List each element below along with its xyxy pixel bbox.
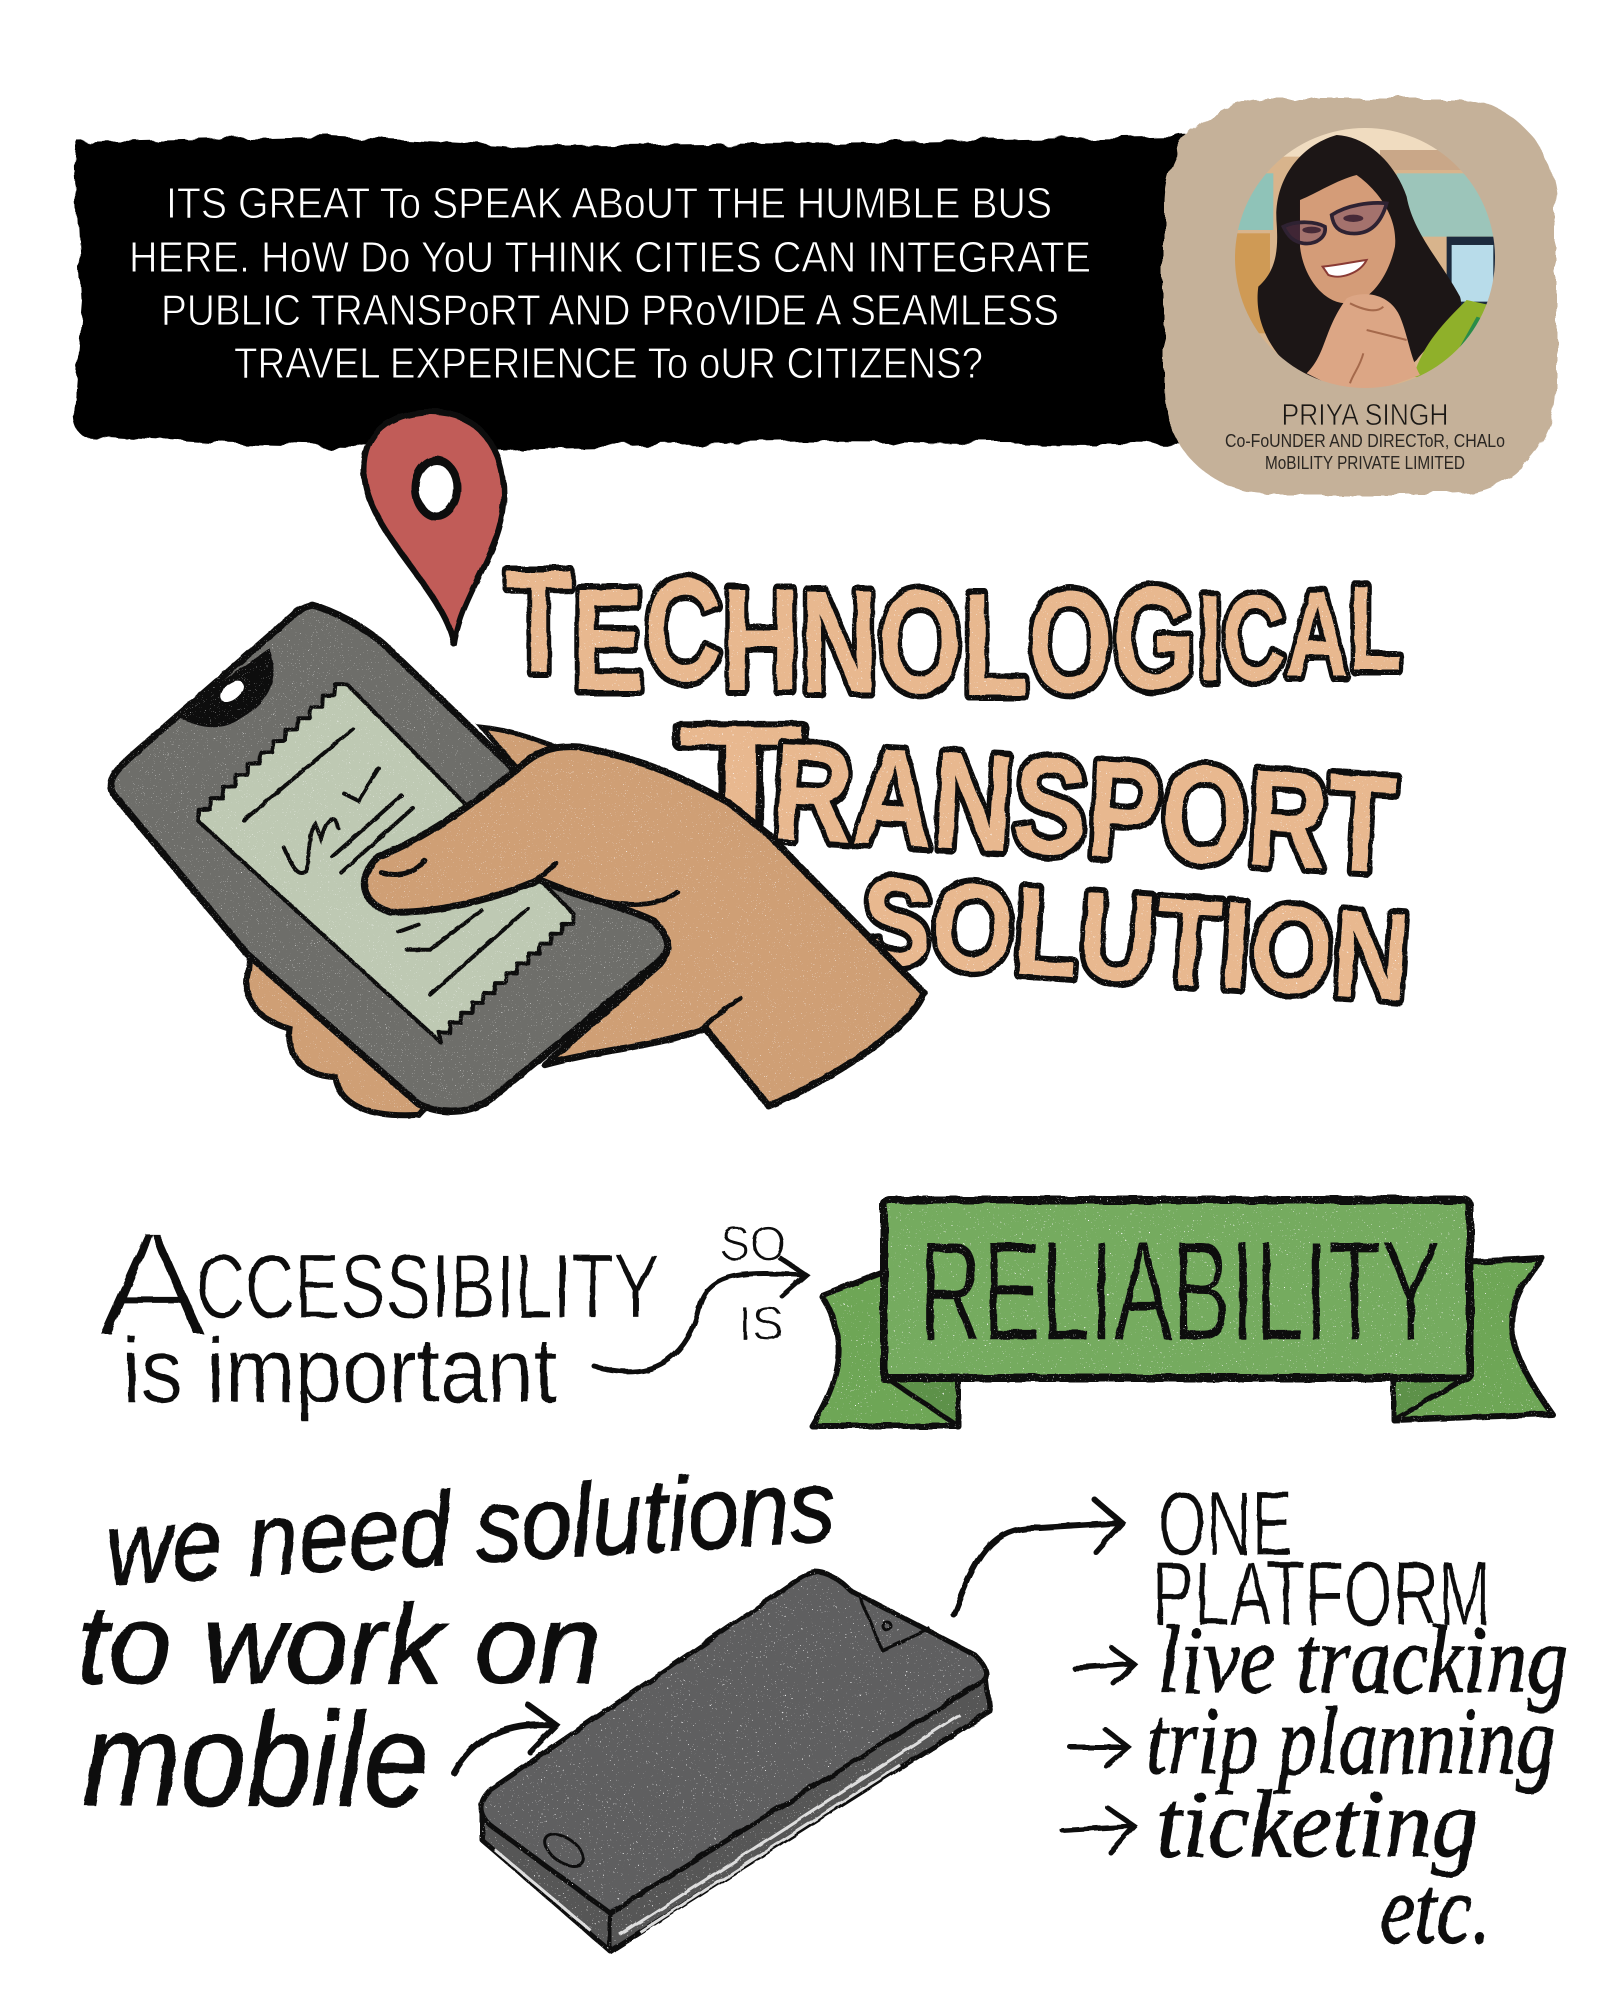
fingers behind phone [247, 939, 482, 1115]
question text: ITS GREAT To SPEAK ABoUT THE HUMBLE BUS [166, 179, 1052, 228]
green reliability ribbon [812, 1200, 1552, 1426]
speaker portrait [1230, 123, 1500, 390]
accessibility text [96, 1199, 659, 1422]
is important: is important [122, 1320, 557, 1422]
we need solutions text: mobile [83, 1686, 429, 1833]
phone body [111, 605, 668, 1111]
black question banner [73, 136, 1200, 450]
arrow: so is [595, 1218, 806, 1372]
title: technological transport solution: T [678, 692, 804, 871]
one platform list [1062, 1473, 1568, 1963]
title: technological transport solution: TECHNOLOG [506, 540, 1196, 726]
speaker role: MoBILITY PRIVATE LIMITED [1265, 453, 1465, 473]
eyes [1302, 227, 1321, 233]
face [1300, 175, 1395, 303]
one platform list: etc. [1380, 1856, 1491, 1963]
question text: HERE. HoW Do YoU THINK CITIES CAN INTEGRATE [129, 233, 1091, 282]
hand holding phone [111, 605, 924, 1115]
arrow: so is: IS [738, 1298, 784, 1351]
we need solutions text: to work on [77, 1582, 601, 1707]
question text [129, 179, 1091, 388]
hair [1258, 135, 1461, 390]
one platform list: ONE [1158, 1473, 1293, 1575]
speaker card [1164, 98, 1556, 494]
we need solutions text [77, 1448, 838, 1833]
smile [1323, 260, 1367, 277]
accessibility text: A [96, 1199, 209, 1369]
arrow: so is: SO [720, 1218, 786, 1271]
we need solutions text: we need solutions [102, 1448, 838, 1608]
phone camera [175, 648, 274, 727]
clasped hands [1307, 294, 1420, 388]
title: technological transport solution: SOLUTION [856, 851, 1414, 1027]
arrow to phone [454, 1705, 556, 1773]
title: technological transport solution: RANSPORT [768, 714, 1400, 903]
map pin icon [364, 412, 504, 644]
title: technological transport solution: ICAL [1198, 560, 1402, 706]
one platform list: ticketing [1156, 1770, 1478, 1877]
digital ticket on screen [198, 684, 574, 1043]
glasses [1283, 203, 1387, 244]
question text: TRAVEL EXPERIENCE To oUR CITIZENS? [234, 339, 983, 388]
arrow to one platform [954, 1500, 1122, 1615]
saree [1414, 300, 1486, 378]
accessibility text: CCESSIBILITY [196, 1236, 659, 1338]
speaker role [1225, 431, 1505, 473]
question text: PUBLIC TRANSPoRT AND PRoVIDE A SEAMLESS [161, 286, 1059, 335]
speaker role: Co-FoUNDER AND DIRECToR, CHALo [1225, 431, 1505, 451]
dark smartphone illustration [481, 1572, 990, 1951]
hand and thumb [364, 747, 924, 1106]
title: technological transport solution [506, 540, 1414, 1027]
speaker name: PRIYA SINGH [1282, 397, 1448, 432]
